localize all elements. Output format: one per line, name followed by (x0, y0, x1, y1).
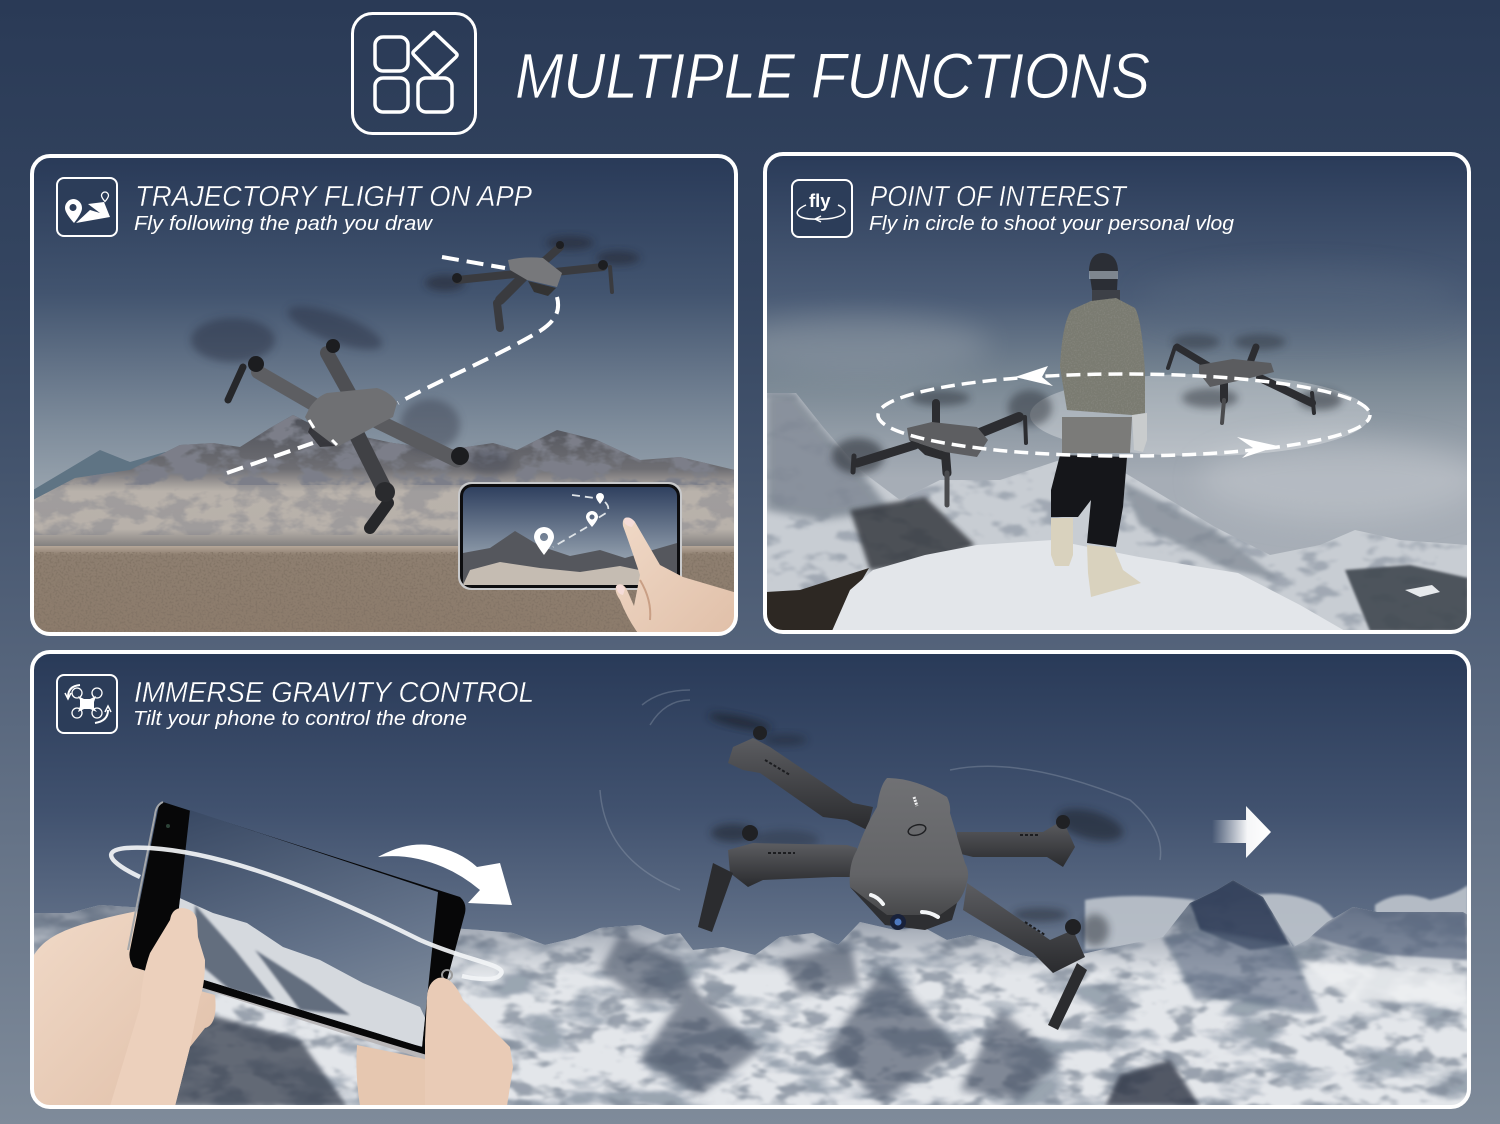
subheading: trajectory flight: Fly following the path you draw (134, 212, 433, 235)
phone held in hands (128, 800, 465, 1060)
arrow: lower, rightward (1237, 437, 1278, 458)
heading: point of interest: POINT OF INTEREST (870, 181, 1128, 213)
arrow: upper, leftward (1015, 366, 1053, 386)
translucent flight ring (1030, 374, 1370, 456)
phone with mini route (458, 482, 682, 590)
heading: immerse gravity control: IMMERSE GRAVITY CONTROL (134, 677, 534, 709)
icon: fly circle: fly (809, 190, 831, 211)
clouds (1085, 885, 1468, 950)
icon: fly circle (792, 180, 852, 237)
arrow: curved tilt (378, 844, 512, 905)
left palm behind phone (33, 911, 216, 1106)
right thumb (425, 978, 513, 1106)
dashed flight path (227, 257, 558, 473)
dashed circular path (878, 374, 1370, 456)
sky (34, 245, 734, 490)
cloudy sky (767, 218, 1467, 555)
title: MULTIPLE FUNCTIONS (515, 40, 1150, 112)
panel border (32, 652, 1469, 1107)
panel: immerse gravity control (32, 652, 1469, 1110)
panel: trajectory flight (32, 156, 737, 636)
subheading: immerse gravity control: Tilt your phone to control the drone (133, 707, 467, 730)
right palm behind phone (356, 1045, 425, 1105)
main drone (600, 690, 1161, 1030)
distant mountains (34, 450, 166, 500)
snow peak (832, 540, 1345, 631)
icon: tilting quadcopter (57, 675, 117, 733)
icon: route pins (57, 178, 117, 236)
panel border (32, 156, 736, 634)
snowy mountain range (33, 870, 1468, 1110)
sky (34, 654, 1467, 944)
panel: point of interest (730, 154, 1480, 632)
man standing (1051, 253, 1147, 597)
hand pointing at phone (616, 518, 737, 636)
right drone (1168, 334, 1342, 423)
panel border (765, 154, 1469, 632)
rotation ring (111, 848, 502, 979)
snowy mountain backdrop (766, 390, 1468, 632)
heading: trajectory flight: TRAJECTORY FLIGHT ON APP (135, 181, 533, 213)
arrow: motion to the right (1212, 806, 1271, 858)
small drone (425, 236, 640, 328)
dark rocks (766, 568, 869, 631)
left drone (832, 390, 1052, 505)
left thumb (110, 908, 205, 1106)
gravel ground (33, 546, 735, 636)
large drone (191, 298, 512, 528)
icon: four app tiles (352, 14, 476, 134)
desert mountain range (33, 410, 735, 550)
subheading: point of interest: Fly in circle to shoot your personal vlog (869, 212, 1235, 235)
